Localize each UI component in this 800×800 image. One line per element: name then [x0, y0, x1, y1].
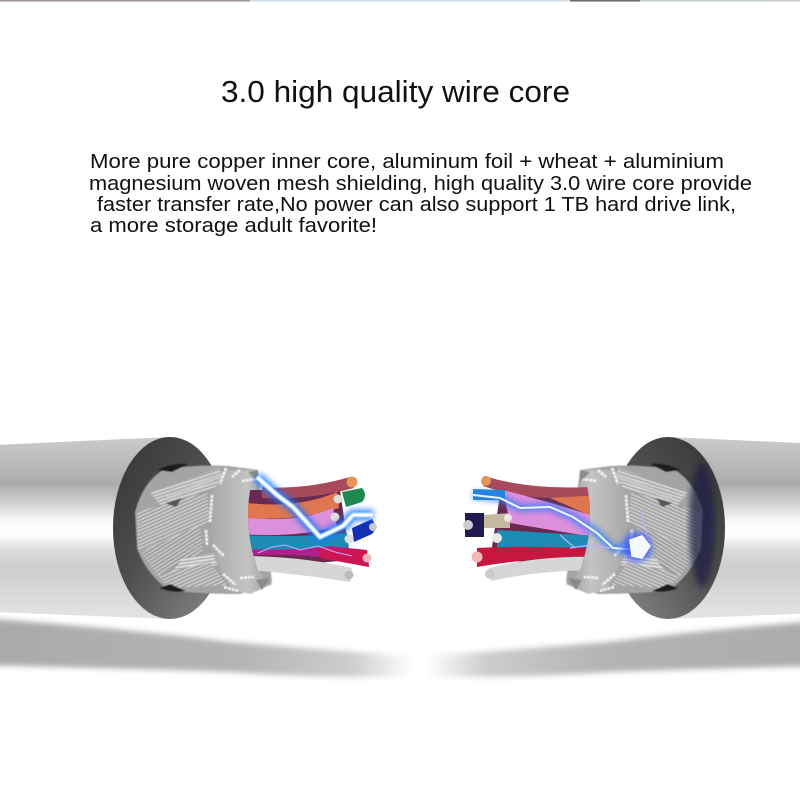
right cable jacket and braid — [566, 437, 800, 619]
right reflection — [426, 618, 800, 677]
right cable lightning — [473, 495, 652, 562]
right cable shadow tint — [689, 463, 715, 587]
top edge strip — [0, 0, 800, 2]
title: 3.0 high quality wire core — [221, 74, 570, 109]
right cable — [463, 437, 800, 619]
description text block: a more storage adult favorite! — [90, 215, 377, 237]
description text block: magnesium woven mesh shielding, high quality 3.0 wire core provide — [89, 173, 752, 195]
description text block: More pure copper inner core, aluminum foil + wheat + aluminium — [90, 151, 724, 173]
left cable lightning — [257, 477, 373, 556]
left cable — [0, 437, 377, 619]
left cable coloured wires — [240, 476, 377, 582]
left reflection — [0, 618, 412, 677]
description text block: faster transfer rate,No power can also support 1 TB hard drive link, — [97, 194, 736, 216]
description text block — [89, 151, 752, 237]
right cable coloured wires — [463, 476, 600, 581]
left cable jacket and braid — [0, 437, 272, 619]
